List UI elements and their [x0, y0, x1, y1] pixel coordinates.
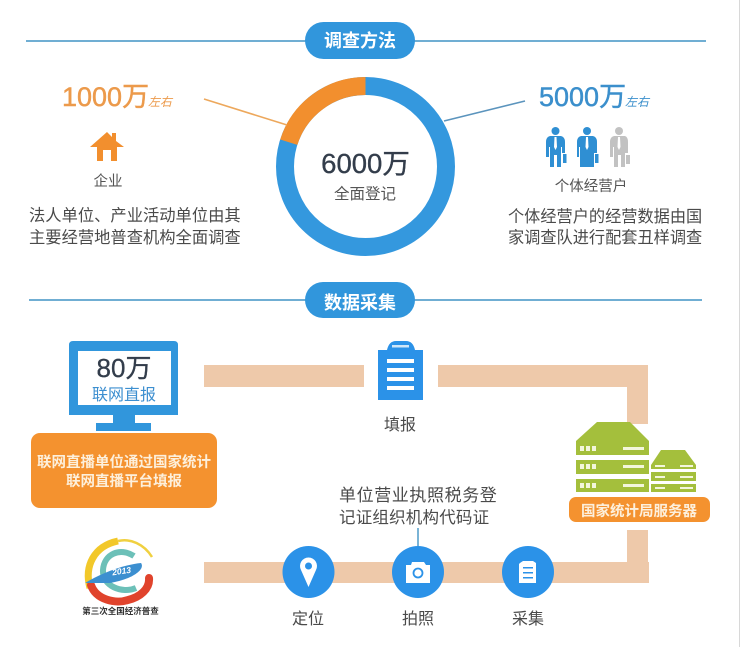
leader line: individual businesses [444, 101, 525, 121]
section header: data collection: 数据采集 [324, 293, 396, 313]
stat: 10 million enterprises: 1000万 [62, 82, 149, 112]
text: license and certificates: 单位营业执照税务登 [339, 486, 497, 505]
leader line: enterprises [204, 99, 287, 125]
label: locate: 定位 [292, 610, 324, 628]
label: individual businesses: 个体经营户 [555, 178, 627, 195]
section header: data collection [29, 282, 702, 318]
stat: 50 million individual businesses: 5000万 [539, 82, 626, 112]
logo: third national economic census: 2013 [111, 565, 132, 577]
text: license and certificates: 记证组织机构代码证 [339, 508, 489, 527]
connector: server to bottom flow [204, 530, 649, 583]
text: individual business description: 家调查队进行配套丑样调查 [508, 229, 702, 247]
icon: computer monitor with 80万: 联网直报 [92, 386, 156, 404]
icon: green servers [576, 422, 696, 492]
section header: survey method [26, 22, 706, 59]
label: national statistics bureau server [569, 497, 710, 522]
logo: third national economic census: 第三次全国经济普查 [82, 606, 159, 616]
icon: location pin [282, 546, 334, 598]
label: fill in: 填报 [384, 416, 416, 434]
icon: computer monitor with 80万 [69, 341, 178, 431]
callout: online direct reporting: 联网直播单位通过国家统计 [37, 453, 211, 471]
text: individual business description: 个体经营户的经营数据由国 [508, 208, 702, 226]
icon: clipboard form [378, 341, 423, 400]
connector: top flow to server [204, 365, 648, 424]
stat: 10 million enterprises: 左右 [148, 95, 174, 109]
text: license and certificates [339, 486, 497, 527]
section header: survey method: 调查方法 [324, 30, 396, 51]
label: collect: 采集 [512, 610, 544, 628]
label: photograph: 拍照 [402, 610, 434, 628]
text: individual business description [508, 208, 702, 247]
icon: three business people [546, 127, 630, 167]
logo: third national economic census [82, 540, 159, 616]
donut chart: total 60 million: 6000万 [321, 148, 410, 179]
icon: house [90, 132, 124, 161]
label: national statistics bureau server: 国家统计局服务器 [581, 502, 697, 520]
leader line: camera to text [417, 528, 419, 548]
donut chart: total 60 million [285, 86, 446, 247]
label: enterprise: 企业 [94, 172, 122, 190]
callout: online direct reporting: 联网直播平台填报 [66, 472, 182, 490]
icon: camera [392, 546, 444, 598]
text: enterprise description: 主要经营地普查机构全面调查 [29, 229, 241, 247]
stat: 50 million individual businesses: 左右 [625, 95, 651, 109]
callout: online direct reporting [31, 433, 217, 508]
icon: collection document [502, 546, 554, 598]
text: enterprise description [29, 207, 241, 247]
donut chart: total 60 million: 全面登记 [334, 185, 396, 203]
icon: computer monitor with 80万: 80万 [97, 353, 151, 383]
text: enterprise description: 法人单位、产业活动单位由其 [29, 207, 241, 225]
